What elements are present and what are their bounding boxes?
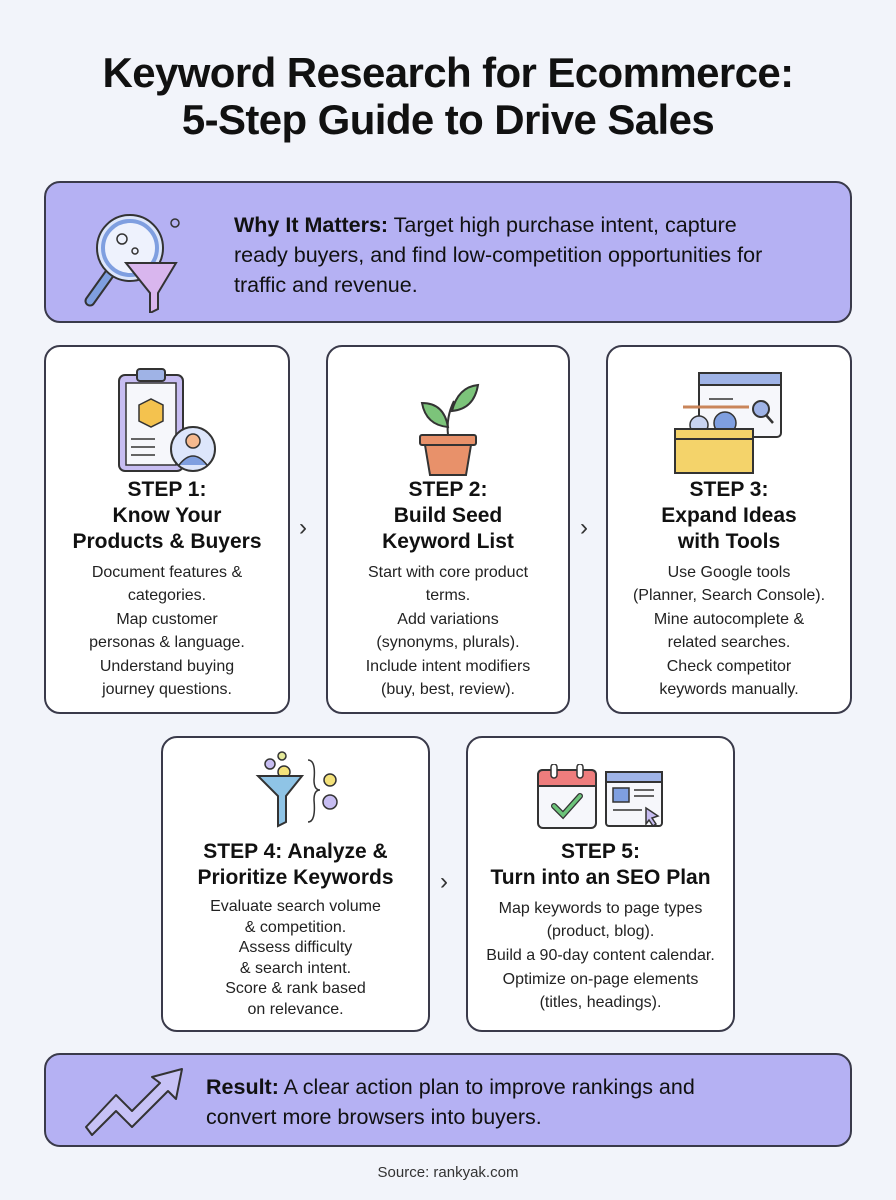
card: step 4: Score & rank based <box>225 980 366 997</box>
icon: clipboard persona <box>118 368 216 472</box>
card: step 3: related searches. <box>668 634 790 651</box>
card: step 4: & competition. <box>245 918 346 936</box>
arrow 1: › <box>299 514 307 541</box>
icon: magnifier funnel <box>84 214 180 313</box>
card: step 5: (product, blog). <box>547 923 654 940</box>
card: step 4: & search intent. <box>240 960 351 976</box>
card: step 1: Document features & <box>92 564 242 581</box>
title: Keyword Research for Ecommerce: <box>102 49 794 96</box>
card: step 3: STEP 3: <box>690 478 768 501</box>
icon: toolbox browser <box>674 372 782 474</box>
card: step 5: Turn into an SEO Plan <box>490 866 711 889</box>
card: step 4: Evaluate search volume <box>210 898 381 915</box>
card: step 2 <box>326 345 570 714</box>
card: step 3: Check competitor <box>667 658 791 675</box>
card: step 1: journey questions. <box>102 681 232 698</box>
card: step 5: (titles, headings). <box>540 994 661 1011</box>
card: step 1: Understand buying <box>100 658 234 675</box>
card: step 4: STEP 4: Analyze & <box>203 840 388 863</box>
card: step 2: Build Seed <box>394 504 502 527</box>
card: step 5: Map keywords to page types <box>499 900 702 917</box>
card: step 3: keywords manually. <box>659 681 799 698</box>
card: step 4: on relevance. <box>247 1000 344 1018</box>
card: step 1: categories. <box>128 587 206 604</box>
icon: funnel bubbles <box>256 751 338 828</box>
title <box>102 49 794 143</box>
icon: plant <box>419 384 480 476</box>
card: step 5: Build a 90-day content calendar. <box>486 947 715 964</box>
text: why it matters: Why It Matters: Target high purchase intent, capture ready buyers, and find low-competition opportunities for traffic and revenue. <box>234 213 762 297</box>
card: step 3: Mine autocomplete & <box>654 611 804 628</box>
panel: why it matters <box>44 181 852 323</box>
text: result: Result: A clear action plan to improve rankings and convert more browsers into buyers. <box>206 1075 695 1129</box>
card: step 2: Include intent modifiers <box>366 658 530 675</box>
card: step 1: Products & Buyers <box>72 530 262 553</box>
card: step 5 <box>466 736 735 1032</box>
card: step 1: STEP 1: <box>128 478 206 501</box>
card: step 4: Assess difficulty <box>239 939 352 956</box>
icon: trend arrow <box>85 1068 183 1136</box>
arrow 3: › <box>440 868 448 895</box>
card: step 2: Start with core product <box>368 564 528 581</box>
card: step 4 <box>161 736 430 1032</box>
card: step 3: with Tools <box>678 530 780 553</box>
card: step 5: Optimize on-page elements <box>503 971 698 988</box>
card: step 3: (Planner, Search Console). <box>633 587 825 604</box>
card: step 2: (synonyms, plurals). <box>376 634 520 651</box>
card: step 2: STEP 2: <box>408 478 487 501</box>
card: step 2: Keyword List <box>382 530 514 553</box>
card: step 3 <box>606 345 852 714</box>
card: step 3: Expand Ideas <box>661 504 797 527</box>
card: step 1: Map customer <box>116 611 218 628</box>
panel: result <box>44 1053 852 1147</box>
card: step 1 <box>44 345 290 714</box>
card: step 2: (buy, best, review). <box>381 681 515 698</box>
card: step 4: Prioritize Keywords <box>197 866 394 889</box>
source: Source: rankyak.com <box>378 1164 518 1181</box>
card: step 2: terms. <box>426 587 470 604</box>
card: step 2: Add variations <box>397 611 499 628</box>
title: 5-Step Guide to Drive Sales <box>182 96 714 143</box>
arrow 2: › <box>580 514 588 541</box>
card: step 3: Use Google tools <box>668 564 790 581</box>
card: step 1: Know Your <box>113 504 221 527</box>
card: step 5: STEP 5: <box>561 840 640 863</box>
card: step 1: personas & language. <box>89 634 245 651</box>
icon: calendar and webpage <box>537 764 663 829</box>
